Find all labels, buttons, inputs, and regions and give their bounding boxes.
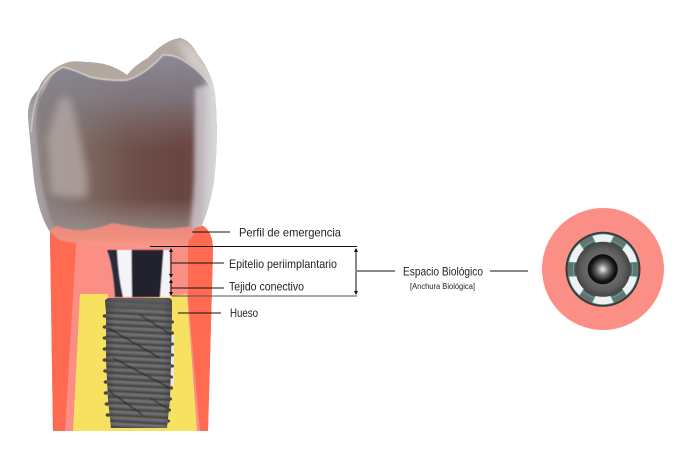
socket outline <box>574 240 632 299</box>
bracket shaft <box>355 249 357 294</box>
label: Espacio Biológico: Espacio Biológico <box>403 264 483 278</box>
label: Epitelio periimplantario: Epitelio periimplantario <box>229 257 337 271</box>
abutment <box>107 250 170 297</box>
top view of implant in gum <box>542 208 664 330</box>
rim highlight line <box>31 55 213 132</box>
tejido arrow shaft <box>170 281 172 295</box>
label: Perfil de emergencia: Perfil de emergencia <box>239 226 341 240</box>
gum disc <box>542 208 664 330</box>
red gum left edge overlay <box>50 233 76 431</box>
hueso leader <box>178 312 221 314</box>
lobes <box>567 234 639 305</box>
thread crests <box>103 314 174 423</box>
arrowheads <box>169 248 562 296</box>
label: Anchura Biológica: [Anchura Biológica] <box>410 282 475 291</box>
crown <box>28 38 217 240</box>
slanted flutes <box>108 315 172 415</box>
tejido leader <box>171 287 224 289</box>
left highlight <box>47 97 88 198</box>
top limit line <box>150 246 357 248</box>
gum collar under crown <box>50 223 193 248</box>
gum and bone cross-section <box>50 226 213 431</box>
right edge highlight <box>188 83 216 236</box>
left rim <box>28 102 48 227</box>
red gum right edge overlay <box>188 226 213 431</box>
width arrow shaft <box>545 270 560 272</box>
perfil leader <box>192 231 230 233</box>
occlusal surface <box>40 38 216 98</box>
epitelio leader <box>171 262 224 264</box>
espacio leader left <box>357 270 395 272</box>
central ball <box>588 254 618 284</box>
bone <box>73 294 197 431</box>
inner body <box>36 56 214 242</box>
inner grey disc <box>576 242 630 297</box>
implant outer ring <box>566 232 640 307</box>
pale gap beside implant <box>171 335 174 385</box>
epitelio arrow shaft <box>170 249 172 276</box>
implant screw <box>102 298 174 428</box>
label: Tejido conectivo: Tejido conectivo <box>229 280 304 294</box>
label: Hueso: Hueso <box>230 306 258 320</box>
dimension lines <box>150 232 560 313</box>
espacio leader right <box>490 270 528 272</box>
bottom limit line <box>172 295 357 297</box>
